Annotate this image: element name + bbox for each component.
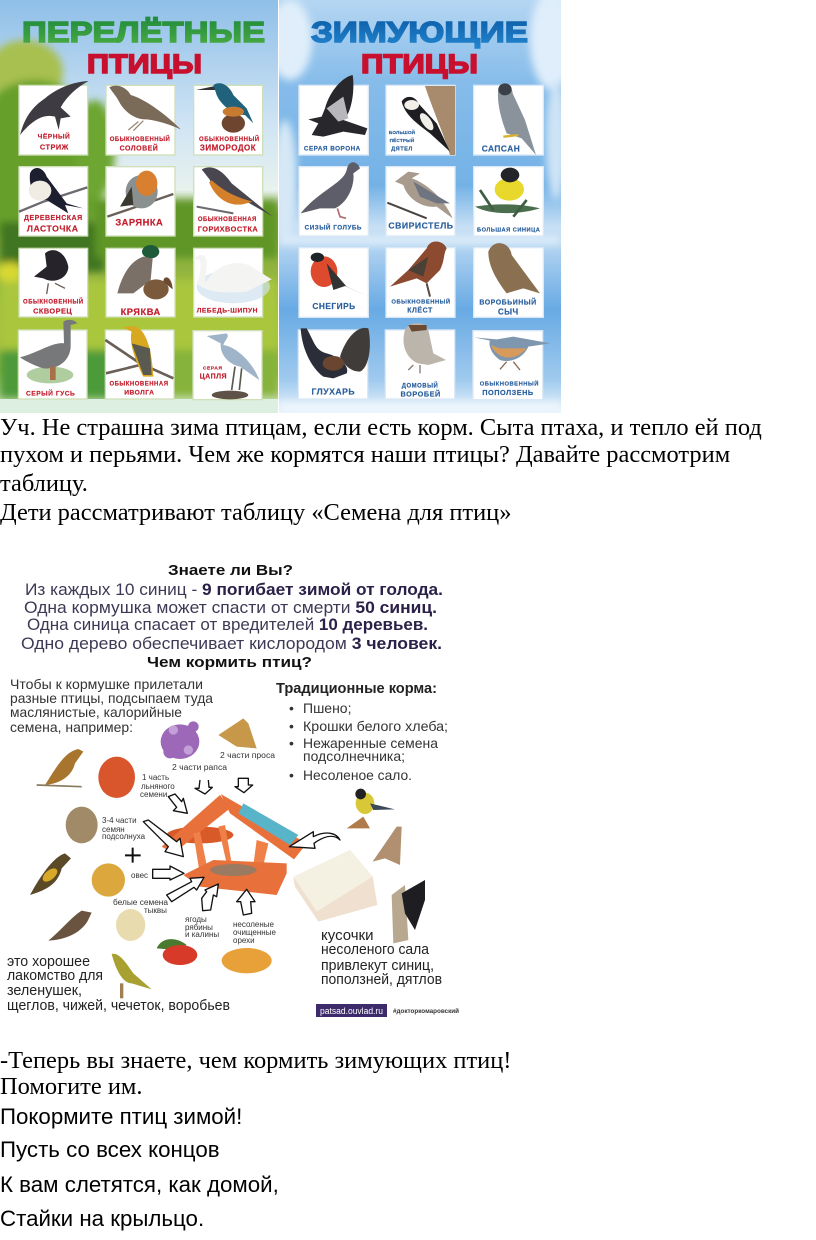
- icon: sunflower seeds: [66, 807, 98, 843]
- icon: plus: [125, 848, 141, 863]
- caption: это хорошее лакомство: зеленушек,: [7, 982, 82, 999]
- intro text block: Чтобы к кормушке прилетали: [10, 676, 203, 692]
- card: обыкновенная горихвостка: ГОРИХВОСТКА: [198, 224, 258, 233]
- traditional feeds list: Традиционные корма:: [276, 681, 437, 697]
- icon: nuthatch: [373, 827, 402, 865]
- traditional feeds list: •: [289, 718, 294, 734]
- small seed labels: 1 часть: [142, 773, 169, 782]
- facts text block: Одна кормушка может спасти от смерти 50 синиц.: [24, 598, 437, 617]
- card: глухарь: ГЛУХАРЬ: [311, 386, 355, 396]
- card: сапсан: САПСАН: [482, 144, 520, 154]
- card: обыкновенный зимородок: [194, 83, 263, 155]
- card: обыкновенная иволга: ИВОЛГА: [124, 390, 154, 397]
- icon: oats: [92, 863, 125, 897]
- small seed labels: орехи: [233, 936, 255, 945]
- traditional feeds list: Крошки белого хлеба;: [303, 718, 448, 734]
- facts text block: Одно дерево обеспечивает кислородом 3 человек.: [21, 634, 442, 653]
- card: воробьиный сыч: ВОРОБЬИНЫЙ: [479, 298, 537, 307]
- small seed labels: семени: [140, 790, 167, 799]
- paragraph: line 2: пухом и перьями. Чем же кормятся наши птицы? Давайте рассмотрим: [0, 441, 730, 468]
- card: деревенская ласточка: ДЕРЕВЕНСКАЯ: [24, 215, 83, 222]
- card: обыкновенная горихвостка: [194, 167, 273, 236]
- hashtag: #докторкомаровский: [393, 1007, 459, 1015]
- small seed labels: 2 части рапса: [172, 763, 228, 772]
- card: обыкновенный клёст: КЛЁСТ: [407, 307, 433, 315]
- heading: Знаете ли Вы?: Знаете ли Вы?: [168, 562, 293, 579]
- card: снегирь: СНЕГИРЬ: [312, 301, 356, 311]
- caption: это хорошее лакомство: щеглов, чижей, чечеток, воробьев: [7, 997, 230, 1014]
- paragraph: teacher line: Уч. Не страшна зима птицам, если есть корм. Сыта птаха, и тепло ей под: [0, 414, 762, 441]
- icon: sparrow: [48, 911, 92, 941]
- paragraph: now you know: -Теперь вы знаете, чем кормить зимующих птиц!: [0, 1047, 511, 1074]
- card: свиристель: СВИРИСТЕЛЬ: [388, 221, 454, 231]
- card: лебедь-шипун: [193, 248, 272, 317]
- poster background: summer landscape: [0, 0, 278, 413]
- card: чёрный стриж: СТРИЖ: [40, 143, 69, 152]
- card: большой пёстрый дятел: [386, 85, 455, 155]
- card: глухарь: [298, 328, 370, 399]
- card: обыкновенный соловей: ОБЫКНОВЕННЫЙ: [110, 135, 170, 143]
- card: обыкновенный скворец: ОБЫКНОВЕННЫЙ: [23, 298, 84, 306]
- card: обыкновенный поползень: [473, 331, 551, 400]
- small seed labels: льняного: [141, 782, 175, 791]
- card: обыкновенный зимородок: ЗИМОРОДОК: [200, 144, 256, 153]
- small seed labels: ягоды: [185, 915, 207, 924]
- paragraph: line 3: таблицу.: [0, 470, 88, 497]
- card: большой пёстрый дятел: ПЁСТРЫЙ: [390, 136, 415, 143]
- card: обыкновенная иволга: [105, 326, 174, 399]
- facts text block: [21, 580, 443, 653]
- caption: это хорошее лакомство: [7, 953, 230, 1014]
- card: обыкновенная горихвостка: ОБЫКНОВЕННАЯ: [198, 217, 257, 223]
- title: ПТИЦЫ: ПТИЦЫ: [361, 49, 478, 79]
- caption: это хорошее лакомство: лакомство для: [7, 967, 103, 984]
- small seed labels: несоленые: [233, 920, 275, 929]
- card: домовый воробей: ДОМОВЫЙ: [402, 381, 438, 389]
- card: обыкновенный соловей: СОЛОВЕЙ: [120, 144, 158, 153]
- traditional feeds list: Нежаренные семена: [303, 735, 438, 751]
- card: серая цапля: ЦАПЛЯ: [200, 374, 227, 381]
- card: обыкновенный поползень: ОБЫКНОВЕННЫЙ: [480, 379, 539, 387]
- icon: feeder: [162, 794, 307, 895]
- icon: pumpkin seeds: [116, 909, 145, 941]
- card: свиристель: [386, 167, 455, 236]
- icon: tit: [347, 789, 395, 828]
- icon: nuts: [222, 948, 272, 973]
- caption: кусочки несоленого сала: поползней, дятлов: [321, 971, 442, 988]
- card: большой пёстрый дятел: ДЯТЕЛ: [391, 147, 413, 153]
- icon: flax seeds lower part: [102, 778, 132, 793]
- poster: wintering birds: [268, 0, 574, 413]
- intro text block: разные птицы, подсыпаем туда: [10, 690, 213, 706]
- card: воробьиный сыч: [474, 243, 543, 317]
- card: воробьиный сыч: СЫЧ: [498, 308, 519, 317]
- card: обыкновенный клёст: [386, 241, 455, 317]
- intro text block: [10, 676, 213, 735]
- icon: millet: [218, 718, 257, 748]
- card: обыкновенный скворец: СКВОРЕЦ: [33, 306, 72, 315]
- intro text block: маслянистые, калорийные: [10, 704, 182, 720]
- traditional feeds list: Пшено;: [303, 700, 352, 716]
- card: чёрный стриж: [19, 81, 89, 155]
- paragraph: children look at the table: Дети рассматривают таблицу «Семена для птиц»: [0, 499, 511, 526]
- facts text block: Из каждых 10 синиц - 9 погибает зимой от голода.: [25, 580, 443, 599]
- badge: patsad.ouvlad.ru: patsad.ouvlad.ru: [320, 1006, 383, 1016]
- traditional feeds list: •: [289, 735, 294, 751]
- small seed labels: очищенные: [233, 928, 276, 937]
- card: обыкновенная иволга: ОБЫКНОВЕННАЯ: [109, 382, 169, 388]
- heading: Чем кормить птиц?: Чем кормить птиц?: [147, 654, 312, 671]
- card: серая ворона: [299, 75, 368, 155]
- caption: это хорошее лакомство: это хорошее: [7, 953, 90, 970]
- icon: siskin: [112, 954, 152, 989]
- card: обыкновенный клёст: ОБЫКНОВЕННЫЙ: [391, 297, 451, 305]
- icon: rowan berries: [157, 939, 197, 965]
- card: сапсан: [474, 83, 543, 155]
- card: сизый голубь: СИЗЫЙ ГОЛУБЬ: [305, 222, 362, 231]
- title: ПТИЦЫ: ПТИЦЫ: [87, 49, 202, 79]
- card: чёрный стриж: ЧЁРНЫЙ: [38, 132, 70, 141]
- card: лебедь-шипун: ЛЕБЕДЬ-ШИПУН: [197, 308, 258, 315]
- poem line 1: Покормите птиц зимой!: [0, 1104, 242, 1129]
- small seed labels: тыквы: [144, 906, 167, 915]
- card: обыкновенный соловей: [106, 85, 181, 155]
- small seed labels: семян: [102, 825, 125, 834]
- small seed labels: рябины: [185, 923, 213, 932]
- card: домовый воробей: ВОРОБЕЙ: [401, 390, 441, 399]
- icon: goldfinch: [30, 853, 71, 895]
- card: обыкновенный поползень: ПОПОЛЗЕНЬ: [482, 388, 534, 397]
- card: большой пёстрый дятел: БОЛЬШОЙ: [389, 128, 416, 135]
- poem line 4: Стайки на крыльцо.: [0, 1206, 204, 1231]
- icon: flax seeds: [98, 757, 135, 798]
- card: серая цапля: СЕРАЯ: [203, 365, 222, 371]
- card: деревенская ласточка: [19, 167, 88, 236]
- card: кряква: [106, 245, 175, 317]
- infographic: seeds for birds: [7, 562, 459, 1017]
- traditional feeds list: [276, 681, 448, 783]
- traditional feeds list: Несоленое сало.: [303, 767, 412, 783]
- traditional feeds list: •: [289, 700, 294, 716]
- traditional feeds list: •: [289, 767, 294, 783]
- icon: rapeseed: [161, 721, 199, 759]
- card: зарянка: [106, 167, 175, 236]
- title: ЗИМУЮЩИЕ: ЗИМУЮЩИЕ: [311, 17, 528, 49]
- card: большая синица: БОЛЬШАЯ СИНИЦА: [477, 228, 540, 234]
- card: обыкновенный зимородок: ОБЫКНОВЕННЫЙ: [199, 135, 260, 143]
- icon: lard: [293, 850, 377, 922]
- card: домовый воробей: [385, 323, 455, 399]
- traditional feeds list: подсолнечника;: [303, 748, 405, 764]
- card: серый гусь: СЕРЫЙ ГУСЬ: [26, 388, 75, 397]
- icon: woodpecker: [392, 880, 425, 943]
- card: снегирь: [299, 248, 368, 317]
- caption: кусочки несоленого сала: кусочки: [321, 927, 374, 944]
- card: серая цапля: [193, 331, 262, 400]
- title: ПЕРЕЛЁТНЫЕ: ПЕРЕЛЁТНЫЕ: [22, 16, 265, 49]
- card: серый гусь: [18, 320, 87, 399]
- caption: кусочки несоленого сала: [321, 927, 442, 988]
- caption: кусочки несоленого сала: привлекут синиц,: [321, 957, 434, 974]
- arrows into feeder: [143, 778, 340, 915]
- paragraph: help them: Помогите им.: [0, 1073, 142, 1100]
- small seed labels: 2 части проса: [220, 751, 276, 760]
- card: кряква: КРЯКВА: [121, 307, 161, 317]
- card: деревенская ласточка: ЛАСТОЧКА: [27, 223, 79, 233]
- poster: migratory birds: [0, 0, 278, 413]
- small seed labels: подсолнуха: [102, 832, 146, 841]
- card: большая синица: [474, 167, 543, 236]
- small seed labels: белые семена: [113, 898, 169, 907]
- facts text block: Одна синица спасает от вредителей 10 деревьев.: [27, 615, 428, 634]
- card: зарянка: ЗАРЯНКА: [115, 218, 163, 228]
- poem line 3: К вам слетятся, как домой,: [0, 1172, 279, 1197]
- caption: кусочки несоленого сала: несоленого сала: [321, 941, 430, 958]
- small seed labels: 3-4 части: [102, 816, 137, 825]
- intro text block: семена, например:: [10, 719, 133, 735]
- poster background: winter landscape: [268, 0, 574, 413]
- card: сизый голубь: [299, 162, 368, 236]
- small seed labels: и калины: [185, 930, 219, 939]
- card: обыкновенный скворец: [19, 248, 88, 317]
- small seed labels: овес: [131, 871, 148, 880]
- icon: bird feet: [37, 785, 82, 787]
- poem line 2: Пусть со всех концов: [0, 1137, 220, 1162]
- card: серая ворона: СЕРАЯ ВОРОНА: [304, 146, 361, 153]
- icon: bird (greenfinch): [45, 749, 83, 785]
- small seed labels: [102, 751, 276, 945]
